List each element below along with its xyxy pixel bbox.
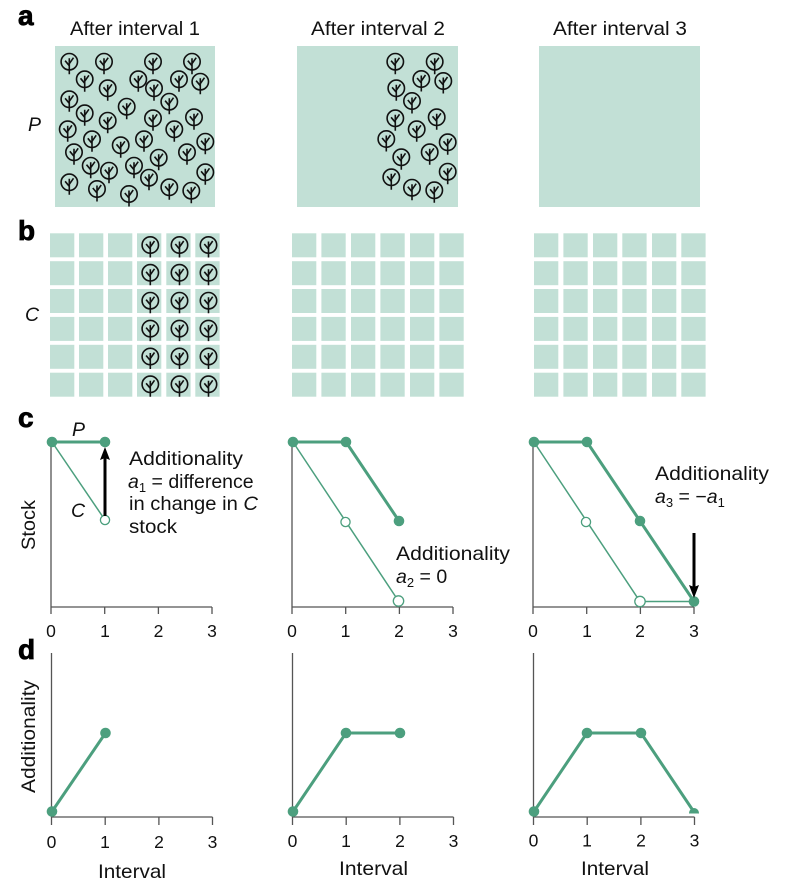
chart: additionality after interval 3: Interval [581,858,649,880]
chart: stock after interval 1: 0 [46,621,56,641]
annotation: additionality a2: Additionality [396,543,510,565]
annotation: additionality a1: Additionality [129,448,243,470]
chart: additionality after interval 3: 1 [582,830,592,850]
panel: control after interval 2 [292,233,464,397]
column title: after interval 1: After interval 1 [70,18,200,40]
chart: additionality after interval 3: 3 [690,830,699,850]
annotation: additionality a1: a [128,471,139,493]
y axis title: stock: Stock [18,500,40,550]
chart: stock after interval 3: 1 [582,621,592,641]
chart: stock after interval 1 [46,419,217,641]
chart: stock after interval 2 [287,437,458,641]
chart: stock after interval 2: 3 [448,621,458,641]
panel label c: c [18,402,34,433]
chart: stock after interval 3: 0 [528,621,538,641]
chart: stock after interval 3: 3 [689,621,699,641]
chart: additionality after interval 2: 2 [395,831,405,851]
chart: stock after interval 1: C [71,500,86,522]
chart: additionality after interval 3 [529,653,699,880]
chart: stock after interval 3: 2 [635,621,645,641]
chart: stock after interval 2: 0 [287,621,297,641]
chart: additionality after interval 2: Interval [339,858,408,880]
row label P: P [28,114,41,136]
chart: additionality after interval 1: 3 [208,832,217,852]
chart: additionality after interval 1: Interval [98,861,166,883]
annotation: additionality a3: 3 [666,495,673,510]
annotation: additionality a3: Additionality [655,463,769,485]
panel: project after interval 1 [55,46,215,207]
panel label a: a [18,0,34,31]
arrow: additionality a1 [100,447,110,516]
annotation: additionality a3: 1 [718,495,725,510]
annotation: additionality a2: 2 [407,575,414,590]
annotation: additionality a3: = − [673,486,707,508]
chart: stock after interval 2: 1 [341,621,350,641]
chart: additionality after interval 2: 0 [288,831,298,851]
column title: after interval 2: After interval 2 [311,18,445,40]
chart: stock after interval 1: 3 [207,621,217,641]
column title: after interval 3: After interval 3 [553,18,687,40]
chart: stock after interval 1: 1 [100,621,110,641]
panel label d: d [18,634,35,665]
panel label b: b [18,215,35,246]
chart: stock after interval 2: 2 [394,621,404,641]
annotation: additionality a3 [655,463,769,510]
chart: stock after interval 1: P [72,419,85,441]
y axis title: additionality: Additionality [18,680,40,793]
chart: additionality after interval 1: 2 [154,832,164,852]
chart: additionality after interval 1: 0 [47,832,57,852]
chart: additionality after interval 3: 0 [529,830,539,850]
arrow: additionality a3 [689,533,699,598]
annotation: additionality a3: a [707,486,718,508]
annotation: additionality a2: = 0 [414,566,447,588]
chart: stock after interval 3 [528,437,699,641]
chart: additionality after interval 1: 1 [100,832,110,852]
panel: control after interval 1 [50,233,220,397]
chart: additionality after interval 2: 1 [341,831,351,851]
panel: project after interval 3 [539,46,700,207]
annotation: additionality a2 [396,543,510,590]
panel: control after interval 3 [534,233,706,397]
annotation: additionality a1: = difference [146,471,254,493]
annotation: additionality a1: stock [129,516,177,538]
chart: additionality after interval 3: 2 [636,830,646,850]
annotation: additionality a1: 1 [139,480,146,495]
chart: additionality after interval 2 [288,653,458,880]
annotation: additionality a1 [128,448,259,538]
chart: additionality after interval 2: 3 [449,831,458,851]
annotation: additionality a2: a [396,566,407,588]
row label C: C [25,304,40,326]
annotation: additionality a1: in change in C [129,493,259,515]
annotation: additionality a3: a [655,486,666,508]
chart: stock after interval 1: 2 [154,621,163,641]
chart: additionality after interval 1 [47,653,217,883]
panel: project after interval 2 [297,46,458,207]
